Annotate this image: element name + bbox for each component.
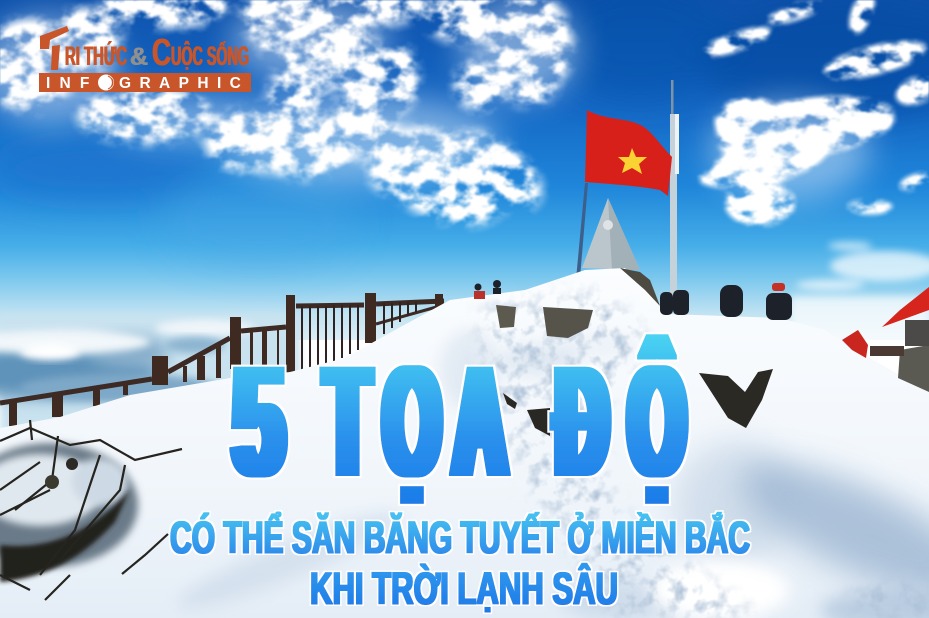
summit pyramid — [582, 198, 640, 270]
title — [233, 334, 685, 509]
subtitles — [170, 512, 750, 614]
title: ĐỘ — [556, 334, 685, 508]
title: 5 — [233, 336, 284, 509]
logo wordmark: & — [130, 43, 148, 71]
logo wordmark: C — [152, 32, 171, 74]
title: TỌA — [326, 334, 506, 508]
clouds, left group — [0, 0, 570, 230]
logo wordmark — [65, 32, 249, 74]
soft cloud haze — [0, 0, 870, 200]
flag pole and mast — [575, 80, 679, 300]
logo ring icon — [98, 74, 114, 90]
snow hills — [0, 268, 929, 618]
bare shrub — [0, 420, 182, 600]
clouds, right group — [699, 0, 929, 225]
people on summit — [474, 280, 868, 358]
bright snow patch — [650, 560, 790, 618]
sky tint — [0, 0, 929, 270]
logo infographic bar — [39, 73, 251, 92]
snow shading — [172, 330, 929, 618]
subtitle line 2: KHI TRỜI LẠNH SÂU — [310, 563, 618, 614]
red flag — [585, 110, 672, 196]
logo — [39, 26, 251, 92]
cloud sea below railing — [0, 316, 300, 436]
logo: INF — [46, 75, 99, 92]
hazy clouds on horizon — [790, 242, 929, 346]
right side flag and hut — [870, 287, 929, 356]
logo: GRAPHIC — [119, 75, 249, 92]
logo wordmark: UỘC SỐNG — [171, 39, 249, 71]
trampled snow texture — [480, 290, 929, 618]
rocks in snow — [496, 268, 929, 436]
logo wordmark: RI THỨC — [65, 40, 127, 71]
railing fence — [0, 293, 444, 426]
logo house mark — [40, 26, 69, 70]
sky background — [0, 0, 929, 340]
